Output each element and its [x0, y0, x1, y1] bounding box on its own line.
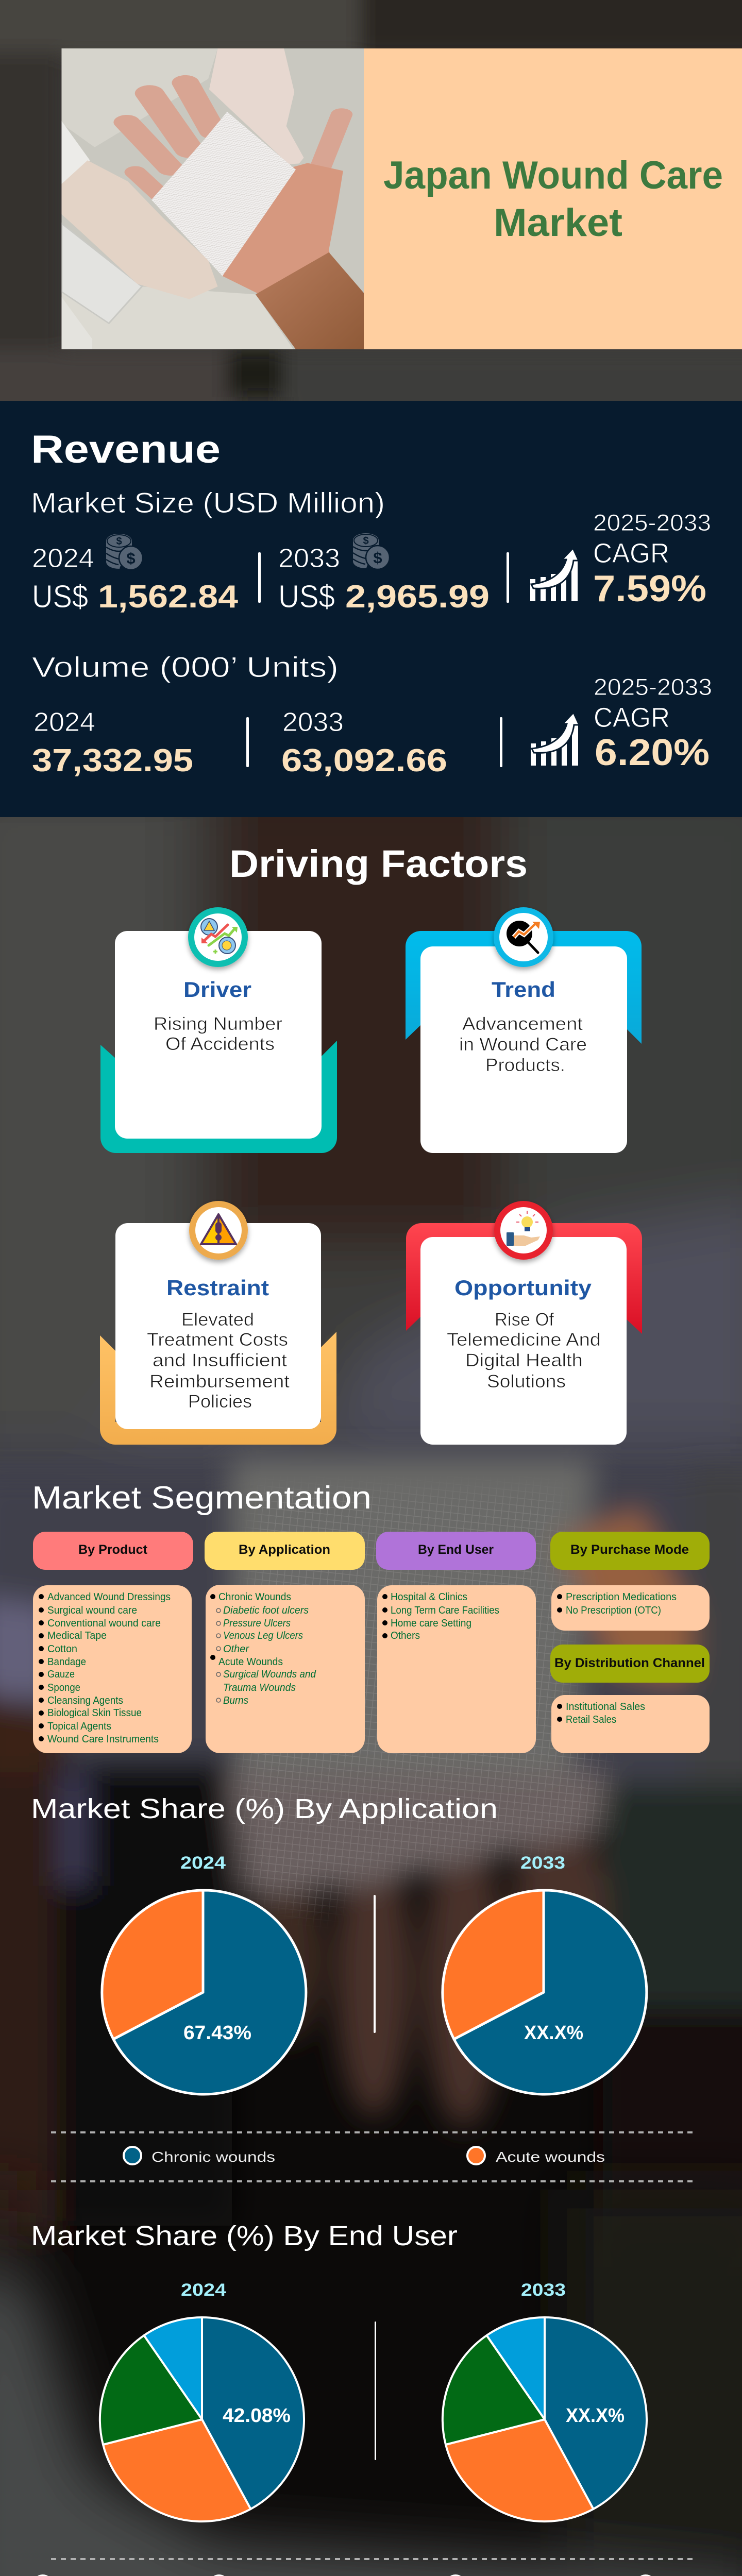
- list: by product: Biological Skin Tissue: [47, 1707, 142, 1719]
- packaging tray: [61, 224, 142, 324]
- title panel: [364, 48, 742, 349]
- trend heading: Trend: [492, 977, 555, 1002]
- segmentation headers: By Application: [239, 1543, 330, 1557]
- opportunity text: Rise Of: [495, 1310, 554, 1330]
- panel: trend: [406, 907, 642, 1153]
- panel: restraint: [100, 1201, 336, 1445]
- list: by product: Wound Care Instruments: [47, 1734, 159, 1745]
- pie chart: end user 2033: 2033: [521, 2280, 566, 2300]
- heading: revenue: Revenue: [31, 428, 221, 471]
- opportunity text: Solutions: [487, 1371, 566, 1392]
- panel: revenue: [0, 401, 742, 817]
- cagr revenue: CAGR: [593, 538, 669, 569]
- heading: market size: Market Size (USD Million): [31, 486, 385, 519]
- segmentation headers: [33, 1532, 710, 1570]
- forearm: [256, 252, 364, 349]
- pie chart: application 2033: [443, 1853, 647, 2094]
- glove hand top: [209, 48, 304, 164]
- pie chart: end user 2033: XX.X%: [566, 2405, 625, 2427]
- volume 2033: 2033: [282, 707, 344, 737]
- volume 2024: 2024: [33, 707, 95, 737]
- gauze pack: [61, 297, 92, 349]
- list: by product: Topical Agents: [47, 1721, 111, 1732]
- value 2024: 2024: [32, 544, 94, 573]
- volume 2024: [32, 707, 193, 778]
- opportunity heading: Opportunity: [454, 1276, 592, 1300]
- list: by product: Conventional wound care: [47, 1618, 161, 1629]
- list: by end user: Long Term Care Facilities: [391, 1605, 499, 1616]
- pie chart: end user 2024: [100, 2280, 304, 2521]
- list: by end user: [377, 1585, 536, 1753]
- driver text: Rising Number: [154, 1014, 282, 1034]
- icon: growth arrow volume: [531, 713, 579, 766]
- value 2024: US$: [32, 579, 88, 615]
- opportunity text: Telemedicine And: [447, 1330, 601, 1350]
- list: by end user: Home care Setting: [391, 1618, 471, 1629]
- list: by product: Gauze: [47, 1669, 75, 1680]
- pie chart: end user 2024: 2024: [181, 2280, 226, 2300]
- list: by application: Trauma Wounds: [223, 1682, 296, 1693]
- panel: opportunity: [406, 1201, 642, 1445]
- trend text: Advancement: [462, 1014, 583, 1034]
- heading: volume: Volume (000’ Units): [32, 651, 339, 683]
- pie chart: application 2033: 2033: [520, 1853, 565, 1873]
- cagr volume: 2025-2033: [594, 674, 712, 700]
- legend: application: Chronic wounds: [151, 2149, 275, 2165]
- list: by application: Other: [223, 1643, 249, 1655]
- value 2033: 2033: [278, 544, 340, 573]
- pie chart: end user 2024: 42.08%: [223, 2405, 291, 2427]
- restraint heading: Restraint: [166, 1276, 269, 1300]
- title: Japan Wound Care: [383, 154, 723, 197]
- icon: coins 2024: [106, 534, 143, 570]
- list: by application: Venous Leg Ulcers: [223, 1630, 303, 1641]
- list: by application: Diabetic foot ulcers: [223, 1605, 309, 1616]
- list: by application: Surgical Wounds and: [223, 1669, 316, 1680]
- list: by purchase mode: No Prescription (OTC): [566, 1605, 661, 1616]
- restraint text: Elevated: [181, 1310, 254, 1330]
- opportunity text: Digital Health: [465, 1350, 583, 1370]
- restraint text: Treatment Costs: [147, 1330, 288, 1350]
- header: by distribution channel: By Distribution Channel: [554, 1656, 705, 1670]
- trend text: in Wound Care: [459, 1035, 587, 1055]
- legend: application: [124, 2147, 605, 2165]
- cagr volume: CAGR: [594, 702, 670, 733]
- list: by product: Bandage: [47, 1656, 86, 1668]
- restraint text: Policies: [188, 1392, 252, 1412]
- heading: driving factors: Driving Factors: [229, 842, 528, 885]
- segmentation headers: By End User: [418, 1543, 494, 1557]
- volume 2033: [281, 707, 447, 778]
- value 2024: 1,562.84: [98, 579, 239, 615]
- volume 2024: 37,332.95: [32, 743, 193, 778]
- icon: coins 2033: [353, 533, 390, 569]
- panel: driver: [100, 907, 337, 1153]
- pie chart: application 2024: [102, 1853, 306, 2094]
- heading: market segmentation: Market Segmentation: [32, 1480, 372, 1516]
- list: by distribution channel: Institutional Sales: [566, 1701, 645, 1713]
- list: by product: Cotton: [47, 1643, 77, 1655]
- pie chart: application 2033: XX.X%: [524, 2022, 583, 2044]
- list: by application: Burns: [223, 1695, 248, 1706]
- list: by application: Acute Wounds: [218, 1656, 283, 1668]
- segmentation headers: By Product: [78, 1543, 148, 1557]
- glove hand left: [61, 160, 217, 299]
- list: by application: [206, 1585, 365, 1753]
- value 2024: [32, 544, 239, 615]
- restraint text: and Insufficient: [153, 1350, 287, 1370]
- title: Market: [494, 201, 622, 245]
- trend text: Products.: [485, 1055, 565, 1075]
- blurred background photo: hand, gauze and fingers behind the lower sections: [0, 773, 742, 2576]
- list: by application: Pressure Ulcers: [223, 1618, 291, 1629]
- blurred background photo: header: [0, 0, 742, 428]
- legend: application: Acute wounds: [496, 2149, 605, 2165]
- list: by application: Chronic Wounds: [218, 1591, 291, 1603]
- header: by distribution channel: [550, 1645, 710, 1683]
- list: by distribution channel: [551, 1695, 710, 1753]
- gauze dressing: [151, 112, 296, 276]
- fingers and palm: [127, 83, 342, 196]
- icon: growth arrow: [530, 548, 579, 601]
- white sleeve: [61, 121, 90, 184]
- cagr revenue: [593, 510, 711, 609]
- pie chart: application 2024: 2024: [180, 1853, 226, 1873]
- driver text: Of Accidents: [165, 1034, 275, 1054]
- icon: opportunity: [494, 1201, 553, 1260]
- list: by product: Surgical wound care: [47, 1605, 137, 1616]
- icon: trend: [494, 907, 553, 967]
- list: by end user: Hospital & Clinics: [391, 1591, 467, 1603]
- hero photo: bandaged hand: [61, 48, 364, 349]
- cagr revenue: 7.59%: [593, 568, 706, 609]
- value 2033: [278, 544, 490, 615]
- legend: end user: [34, 2575, 713, 2576]
- list: by product: Advanced Wound Dressings: [47, 1591, 171, 1603]
- icon: driver: [188, 907, 248, 967]
- volume 2033: 63,092.66: [281, 743, 447, 778]
- pie chart: end user 2033: [443, 2280, 647, 2521]
- value 2033: 2,965.99: [345, 579, 490, 615]
- icon: restraint: [189, 1201, 248, 1260]
- list: by end user: Others: [391, 1630, 420, 1641]
- restraint text: Reimbursement: [149, 1371, 290, 1392]
- heading: market share by end user: Market Share (%) By End User: [31, 2221, 458, 2251]
- list: by distribution channel: Retail Sales: [566, 1714, 616, 1725]
- value 2033: US$: [278, 579, 335, 615]
- cagr volume: [594, 674, 712, 773]
- list: by product: Medical Tape: [47, 1630, 107, 1641]
- pie chart: application 2024: 67.43%: [183, 2022, 251, 2044]
- list: by purchase mode: [551, 1585, 710, 1631]
- list: by product: Cleansing Agents: [47, 1695, 123, 1706]
- list: by purchase mode: Prescription Medications: [566, 1591, 677, 1603]
- list: by product: Sponge: [47, 1682, 80, 1693]
- segmentation headers: By Purchase Mode: [570, 1543, 689, 1557]
- cagr revenue: 2025-2033: [593, 510, 711, 536]
- driver heading: Driver: [183, 977, 251, 1002]
- heading: market share by application: Market Share (%) By Application: [31, 1793, 498, 1824]
- list: by product: [33, 1585, 192, 1753]
- cagr volume: 6.20%: [595, 732, 710, 773]
